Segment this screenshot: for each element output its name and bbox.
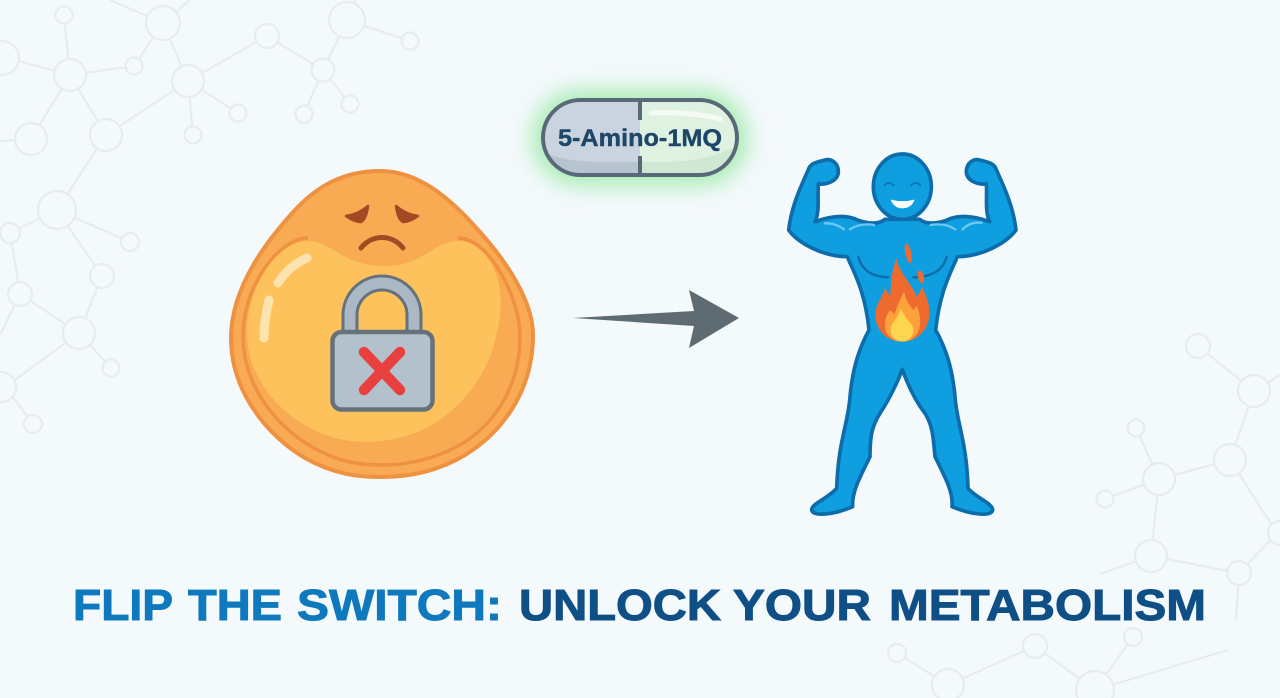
highlight top xyxy=(278,258,307,283)
title word: FLIP: FLIP xyxy=(73,581,173,630)
body xyxy=(789,160,1016,514)
muscle lines xyxy=(825,223,982,277)
flame core xyxy=(891,308,913,341)
padlock body xyxy=(332,332,432,410)
background molecules bottom right xyxy=(888,334,1280,698)
padlock shackle xyxy=(350,283,414,334)
flame outer xyxy=(875,258,929,342)
title word: THE: THE xyxy=(188,581,282,630)
muscular figure with flame xyxy=(789,154,1016,514)
background molecules top left xyxy=(0,0,418,433)
fat cell with locked metabolism xyxy=(231,171,533,477)
smile xyxy=(891,200,915,208)
capsule green glow xyxy=(532,90,748,186)
capsule outline xyxy=(543,100,737,175)
title word: YOUR: YOUR xyxy=(733,581,871,630)
arrow xyxy=(573,290,739,348)
head xyxy=(873,154,931,219)
title word: SWITCH:: SWITCH: xyxy=(297,581,502,630)
membrane inner ring xyxy=(243,238,520,465)
flame embers xyxy=(903,243,925,284)
highlight side xyxy=(264,300,269,338)
capsule label: 5-Amino-1MQ xyxy=(558,125,722,152)
capsule: 5-Amino-1MQ xyxy=(532,90,748,186)
fat cell outer membrane xyxy=(231,171,533,477)
title word: UNLOCK: UNLOCK xyxy=(519,581,721,630)
red cross xyxy=(364,352,400,390)
face xyxy=(884,183,920,208)
flame middle xyxy=(885,292,920,342)
title xyxy=(73,581,1206,630)
capsule seam xyxy=(638,101,642,174)
sad face xyxy=(346,206,418,248)
capsule halves xyxy=(543,100,737,175)
title word: METABOLISM: METABOLISM xyxy=(889,581,1206,630)
flame xyxy=(875,243,929,342)
padlock xyxy=(332,283,432,410)
yellow cytoplasm xyxy=(247,241,501,442)
smiling eyes xyxy=(884,183,920,185)
